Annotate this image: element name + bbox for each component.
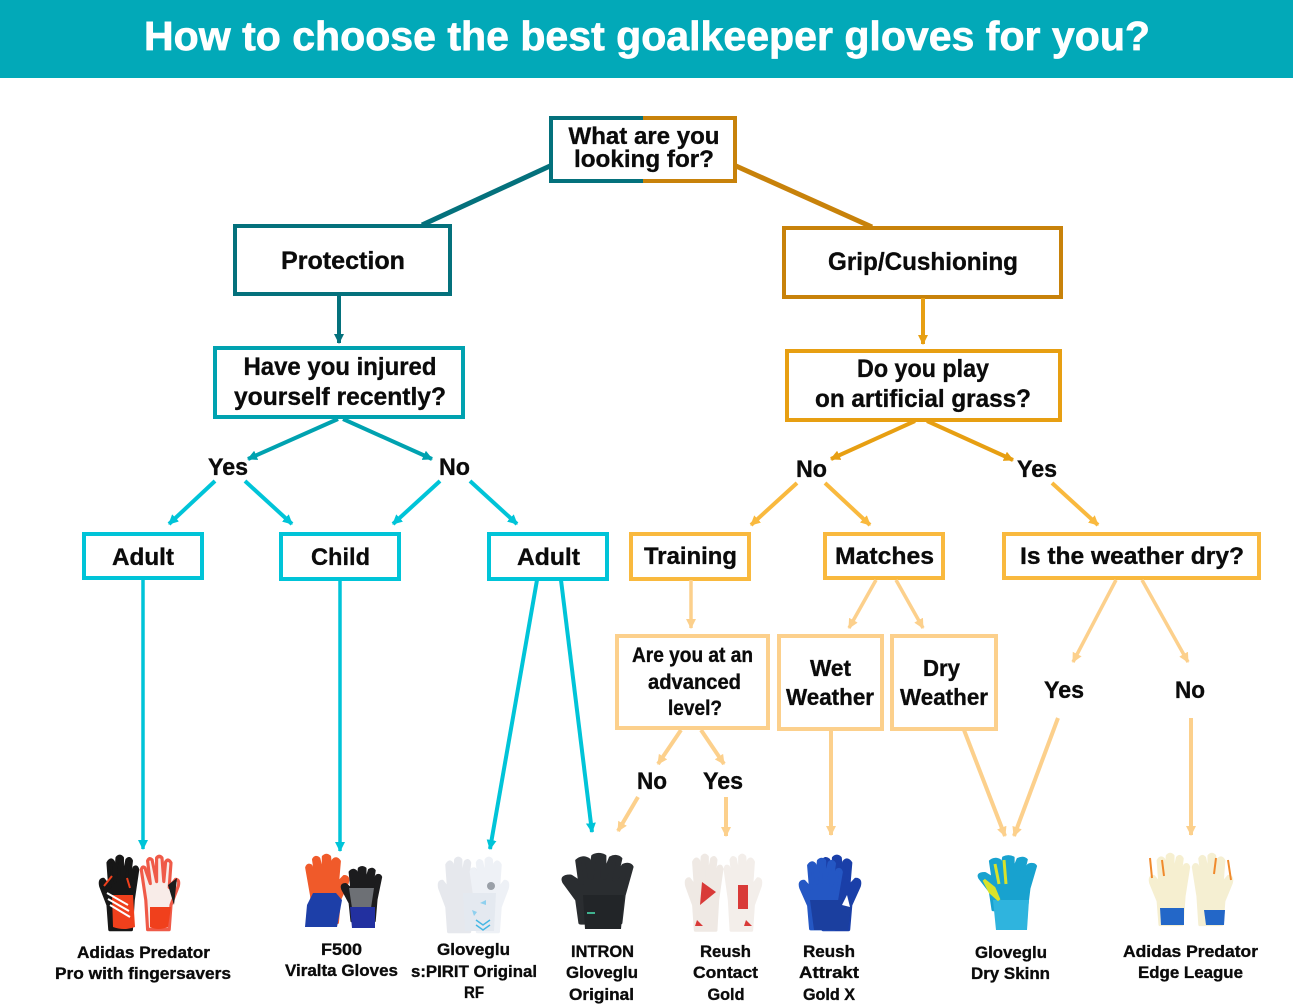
caption: Adidas Predator Pro with fingersavers — [55, 943, 231, 983]
box: Protection: Protection — [281, 247, 405, 275]
box: Have you injured yourself recently?: Have you injured — [244, 353, 436, 381]
box: Have you injured yourself recently? — [215, 348, 463, 417]
caption: F500 Viralta Gloves — [285, 940, 398, 980]
label: Yes (weather dry): Yes — [1044, 677, 1084, 704]
icon: INTRON Gloveglu Original gloves — [564, 854, 631, 929]
box: Are you at an advanced level?: Are you at an — [632, 644, 753, 667]
box: Training: Training — [644, 543, 737, 570]
arrows: Adult right to gloves — [490, 580, 592, 849]
box: Dry Weather: Dry — [923, 655, 960, 681]
label: No (artificial grass): No — [796, 456, 827, 483]
box: Are you at an advanced level?: level? — [668, 697, 722, 720]
box: Adult (right) — [489, 534, 607, 579]
icon: F500 Viralta gloves — [305, 855, 381, 928]
box: Is the weather dry?: Is the weather dry? — [1020, 543, 1244, 570]
caption: Reush Attrakt Gold X: Reush — [803, 942, 855, 961]
caption: Gloveglu Dry Skinn: Gloveglu — [975, 943, 1047, 962]
label: Yes (injured): Yes — [208, 454, 248, 481]
box: Adult (left) — [84, 534, 202, 578]
caption: Adidas Predator Pro with fingersavers: Adidas Predator — [77, 943, 210, 962]
box: Wet Weather: Wet — [810, 655, 851, 681]
caption: INTRON Gloveglu Original — [566, 942, 638, 1004]
box: Are you at an advanced level? — [617, 636, 768, 728]
arrows: artificial grass question to No and Yes — [831, 421, 1013, 460]
arrows: Training and Matches to next boxes — [691, 580, 1188, 662]
box: Wet Weather — [779, 636, 882, 729]
caption: Gloveglu s:PIRIT Original RF: RF — [464, 983, 484, 1002]
caption: Adidas Predator Edge League: Adidas Predator — [1123, 942, 1258, 961]
box: Protection — [235, 226, 450, 294]
caption: INTRON Gloveglu Original: Gloveglu — [566, 963, 638, 982]
box: Child: Child — [311, 544, 370, 571]
box: Matches: Matches — [835, 543, 934, 570]
box: Dry Weather — [892, 636, 996, 729]
box: What are you looking for? — [551, 118, 735, 181]
icon: Reush Attrakt Gold X gloves — [800, 856, 860, 930]
box: Dry Weather: Weather — [900, 684, 988, 710]
arrows: grip No/Yes to next boxes — [751, 483, 1098, 525]
icon: Gloveglu s:PIRIT Original RF gloves — [439, 858, 508, 932]
caption: Reush Attrakt Gold X: Gold X — [803, 985, 856, 1004]
caption: Gloveglu Dry Skinn: Dry Skinn — [971, 964, 1050, 983]
caption: Adidas Predator Edge League: Edge League — [1138, 963, 1243, 982]
box: Do you play on artificial grass?: on artificial grass? — [815, 385, 1031, 413]
box: Wet Weather: Weather — [786, 684, 874, 710]
icon: Reush Contact Gold gloves — [686, 856, 761, 930]
caption: F500 Viralta Gloves: F500 — [321, 940, 362, 959]
caption: Reush Attrakt Gold X: Attrakt — [799, 963, 859, 982]
connector: root to Grip/Cushioning — [736, 166, 872, 227]
caption: Gloveglu Dry Skinn — [971, 943, 1050, 983]
arrows: Adult left and Child to gloves — [143, 580, 340, 851]
icon: Adidas Predator Pro gloves — [100, 856, 179, 930]
arrow: Grip to artificial grass question — [921, 298, 925, 344]
caption: INTRON Gloveglu Original: INTRON — [571, 942, 634, 961]
box: Is the weather dry? — [1004, 534, 1259, 578]
box: Are you at an advanced level?: advanced — [648, 671, 741, 694]
caption: Reush Contact Gold: Reush — [700, 942, 751, 961]
caption: Gloveglu s:PIRIT Original RF: Gloveglu — [437, 940, 510, 959]
box: Training — [631, 534, 749, 579]
box: Matches — [825, 534, 943, 578]
arrows: lower grip branch to gloves — [618, 718, 1191, 836]
caption: Adidas Predator Pro with fingersavers: Pro with fingersavers — [55, 964, 231, 983]
caption: F500 Viralta Gloves: Viralta Gloves — [285, 961, 398, 980]
arrow: Protection to injury question — [337, 295, 341, 343]
title: How to choose the best goalkeeper gloves for you? — [144, 13, 1150, 59]
box: Grip/Cushioning: Grip/Cushioning — [828, 248, 1018, 276]
box: What are you looking for?: What are you — [568, 123, 720, 150]
label: No (weather dry): No — [1175, 677, 1205, 704]
icon: Adidas Predator Edge League gloves — [1150, 854, 1232, 925]
caption: Reush Contact Gold: Gold — [708, 985, 744, 1004]
box: Child — [281, 534, 399, 579]
arrows: protection Yes/No to age boxes — [169, 481, 517, 524]
box: Do you play on artificial grass? — [787, 351, 1060, 420]
box: What are you looking for?: looking for? — [574, 146, 714, 173]
box: Adult (right): Adult — [517, 544, 580, 571]
icon: Gloveglu Dry Skinn gloves — [980, 856, 1035, 930]
connector: root to Protection — [422, 166, 550, 225]
label: No (advanced): No — [637, 768, 667, 795]
box: Have you injured yourself recently?: yourself recently? — [234, 383, 446, 411]
caption: Reush Contact Gold — [693, 942, 758, 1004]
box: Adult (left): Adult — [112, 544, 174, 571]
arrows: injury question to Yes and No — [248, 419, 432, 459]
caption: INTRON Gloveglu Original: Original — [569, 985, 634, 1004]
box: Grip/Cushioning — [784, 228, 1061, 297]
label: No (injured): No — [439, 454, 470, 481]
label: Yes (advanced): Yes — [703, 768, 743, 795]
caption: Gloveglu s:PIRIT Original RF — [411, 940, 537, 1002]
caption: Reush Contact Gold: Contact — [693, 963, 758, 982]
caption: Gloveglu s:PIRIT Original RF: s:PIRIT Original — [411, 962, 537, 981]
caption: Adidas Predator Edge League — [1123, 942, 1258, 982]
label: Yes (artificial grass): Yes — [1017, 456, 1057, 483]
caption: Reush Attrakt Gold X — [799, 942, 859, 1004]
title banner — [0, 0, 1293, 78]
box: Do you play on artificial grass?: Do you play — [857, 355, 989, 383]
